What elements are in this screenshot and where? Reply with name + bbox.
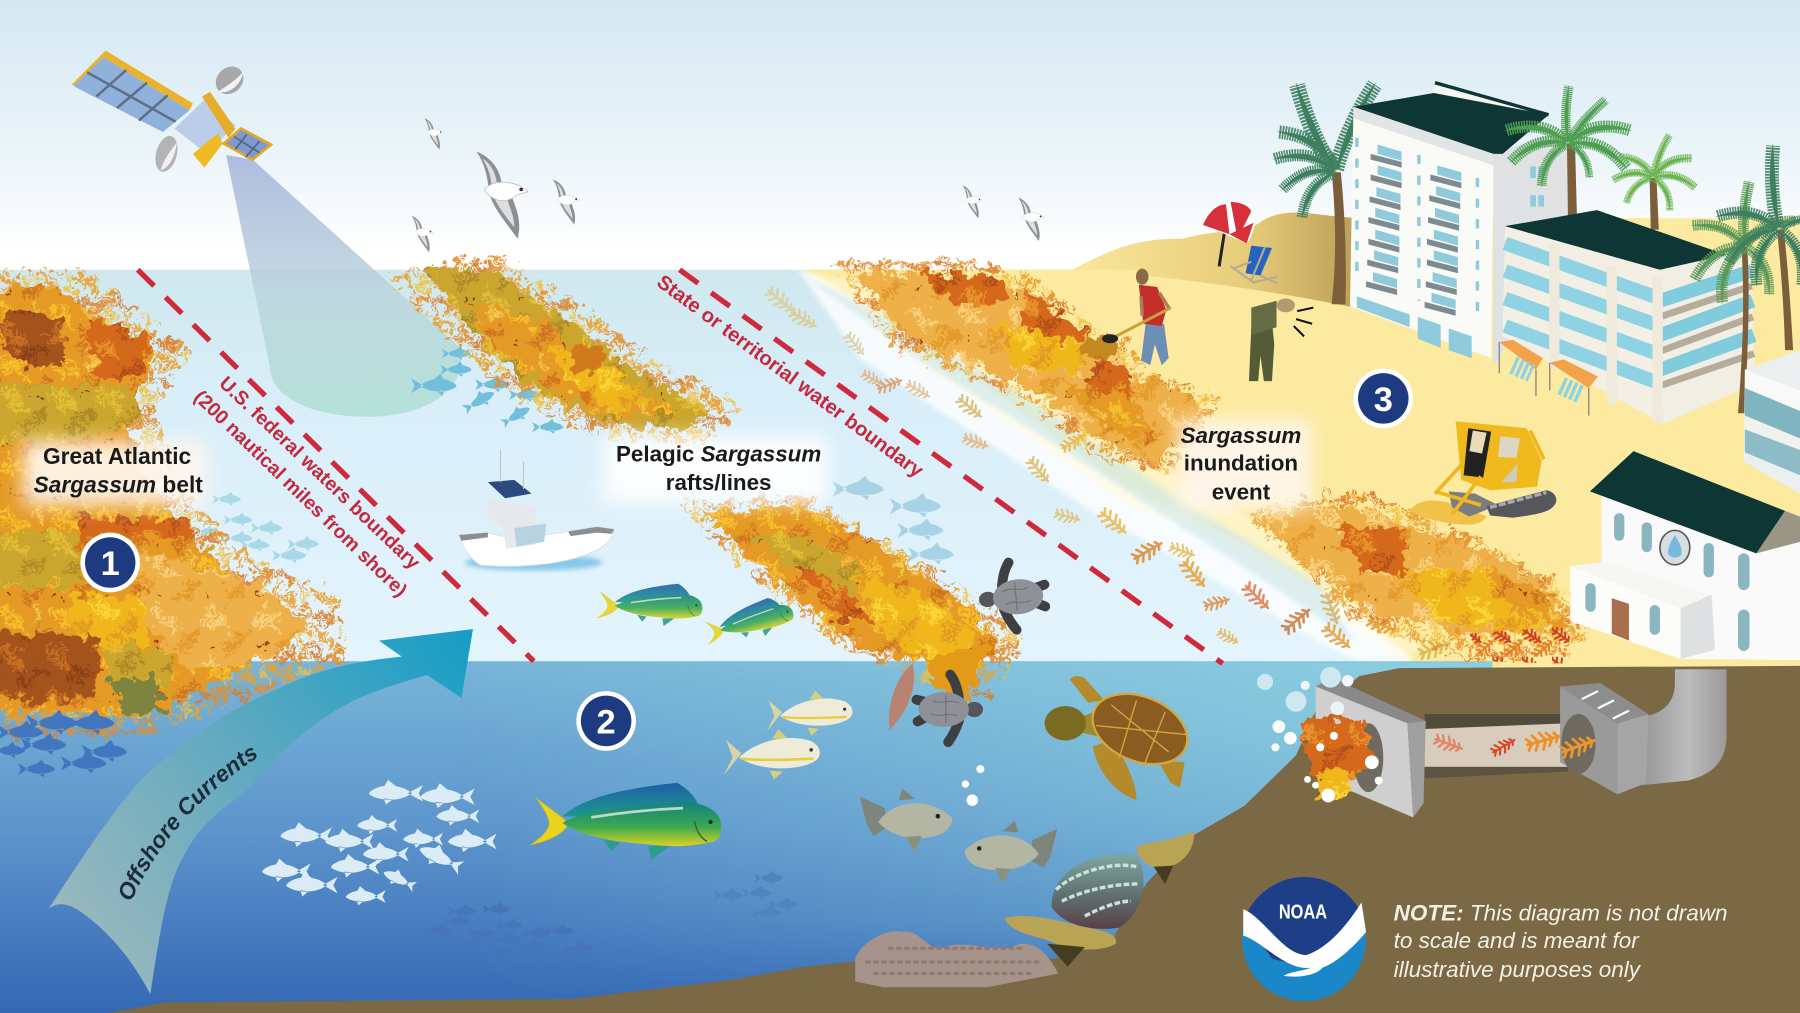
sargassum inundation on lower beach — [1246, 488, 1590, 664]
number marker 1: 1 — [101, 545, 120, 583]
state waters boundary dashed line — [680, 270, 1223, 664]
storefront awning left — [1499, 340, 1543, 396]
boat — [459, 450, 614, 571]
pale wet sand strip — [820, 276, 1423, 664]
palm far right — [1715, 143, 1800, 350]
water intake pipe — [1303, 669, 1727, 817]
number marker 1 — [80, 533, 140, 592]
pale fish near left belt — [195, 492, 319, 563]
surf foam along shoreline — [798, 270, 1412, 677]
hotel tower — [1350, 82, 1572, 367]
inundation mass — [855, 273, 1203, 462]
dark fish school left — [0, 710, 127, 777]
sargassum raft upper ocean — [390, 255, 740, 445]
label: state or territorial water boundary: State or territorial water boundary — [653, 271, 928, 483]
federal waters boundary dashed line — [138, 270, 534, 661]
inundation mass — [1263, 506, 1575, 637]
red sprigs at beach edge — [1469, 626, 1573, 664]
coral rubble — [855, 931, 1058, 987]
disclaimer note: illustrative purposes only — [1394, 957, 1642, 982]
man coughing — [1249, 298, 1313, 381]
connecting tube — [1425, 714, 1568, 778]
label: federal waters boundary: U.S. federal waters boundary — [215, 372, 424, 574]
dark fish school deep — [424, 902, 593, 967]
solar panel small — [224, 129, 271, 160]
sargassum entering intake — [1303, 717, 1375, 798]
roof — [1353, 93, 1549, 154]
seabirds near the beach — [962, 185, 1044, 241]
front face — [1350, 107, 1493, 358]
roof — [1590, 451, 1785, 553]
number marker 2 — [576, 691, 636, 751]
green sea turtle — [1045, 676, 1198, 800]
white fish school — [262, 780, 496, 905]
blade — [1410, 501, 1487, 525]
satellite beam — [226, 155, 461, 417]
roll cage arm — [1435, 431, 1544, 514]
triggerfish left-facing — [965, 821, 1057, 884]
arrow label: Offshore Currents — [120, 748, 257, 900]
left face — [1503, 226, 1663, 424]
inundation lacy edge — [832, 258, 1223, 476]
arched windows — [1585, 513, 1749, 651]
belt lacy edge — [0, 271, 344, 735]
blue fish under first raft — [411, 346, 563, 434]
label: Pelagic Sargassum rafts/lines: rafts/lines — [666, 470, 771, 495]
rising bubbles — [962, 765, 984, 806]
NOAA logo — [1242, 877, 1366, 1001]
small palm right — [1612, 134, 1698, 230]
rear filter box — [1560, 683, 1648, 794]
small turtle at surface — [976, 560, 1048, 633]
right face — [1493, 126, 1572, 367]
pilasters — [1554, 243, 1658, 422]
rear track inner — [1449, 491, 1498, 517]
beach umbrella — [1203, 202, 1255, 266]
palm front of second building — [1687, 180, 1798, 413]
main track — [1487, 490, 1556, 518]
label: Great Atlantic Sargassum belt: Sargassum belt — [34, 471, 203, 497]
right face — [1660, 247, 1755, 424]
main body — [1601, 494, 1800, 660]
sargassum raft lower ocean — [683, 494, 1024, 703]
teal wash by the shore — [804, 276, 1355, 643]
roof — [1505, 210, 1727, 270]
second hotel building — [1499, 210, 1755, 424]
balcony windows — [1366, 145, 1461, 316]
disclaimer note: NOTE: This diagram is not drawn — [1394, 901, 1727, 926]
surface dolphinfish — [597, 584, 797, 651]
side windows — [1530, 172, 1544, 201]
right face stripes — [1660, 271, 1754, 370]
sky background — [0, 0, 1800, 298]
municipal water building — [1570, 451, 1800, 660]
underwater cross-section — [0, 661, 1492, 1013]
label glow: inundation — [1178, 420, 1311, 510]
satellite — [71, 51, 271, 174]
solar panel large — [71, 51, 193, 132]
parapet — [1353, 107, 1493, 165]
ocean surface seen from above — [0, 270, 1492, 666]
number marker 3: 3 — [1374, 381, 1393, 419]
raft mass — [427, 266, 709, 429]
belt mass — [0, 287, 312, 717]
front intake wall — [1316, 677, 1426, 817]
beach chair — [1231, 246, 1278, 284]
palm tree behind hotel left — [1268, 82, 1379, 304]
plate coral lower — [1004, 916, 1116, 967]
storefront awning right — [1550, 359, 1598, 416]
penthouse — [1434, 82, 1549, 129]
door — [1612, 598, 1629, 641]
left face stripes — [1505, 243, 1660, 383]
scattered nearshore sargassum — [764, 285, 1452, 661]
small turtle under raft — [916, 675, 983, 742]
dark fish group right — [714, 871, 798, 919]
pale fish mid ocean — [832, 476, 953, 565]
offshore currents arrow — [48, 629, 473, 994]
number marker 3 — [1353, 369, 1413, 428]
outlet pipe — [1630, 669, 1727, 786]
inundation lacy edge — [1246, 488, 1590, 660]
label: 200 nautical miles: (200 nautical miles from shore) — [189, 386, 411, 601]
worker with shovel — [1102, 269, 1171, 365]
cab — [1456, 421, 1542, 490]
sandy beach and dune — [804, 213, 1800, 672]
sargassum inundation on upper beach — [832, 258, 1223, 476]
label: Sargassum inundation event: inundation — [1184, 451, 1298, 476]
label glow: rafts — [603, 436, 828, 503]
water drop medallion — [1660, 530, 1690, 565]
sargassum belt left — [0, 271, 344, 735]
palm behind hotel right — [1504, 84, 1633, 230]
bulldozer — [1410, 421, 1556, 525]
satellite body — [174, 92, 235, 168]
seabirds over the ocean — [412, 118, 580, 252]
raft lacy edge — [683, 494, 1024, 703]
antenna dishes — [152, 61, 249, 174]
label: Sargassum inundation event: event — [1212, 479, 1271, 504]
triggerfish right-facing — [860, 789, 952, 852]
raft mass — [706, 505, 996, 695]
right edge building — [1744, 350, 1800, 494]
large dolphinfish — [530, 783, 721, 860]
front wing — [1570, 561, 1715, 659]
jack fish — [724, 691, 852, 779]
raft lacy edge — [390, 255, 740, 445]
intake bubbles — [1257, 667, 1383, 802]
cab windows — [1464, 428, 1491, 478]
disclaimer note: to scale and is meant for — [1394, 928, 1640, 953]
kelp leaf — [889, 664, 914, 730]
plate coral upper — [1136, 831, 1194, 884]
seabed and land cross-section — [109, 666, 1800, 1013]
NOAA wordmark: NOAA — [1279, 900, 1327, 923]
label: Pelagic Sargassum rafts/lines: Pelagic Sargassum — [616, 442, 821, 466]
number marker 2: 2 — [597, 704, 616, 742]
ground floor windows — [1357, 296, 1472, 358]
label glow: belt — [23, 441, 207, 505]
label: Great Atlantic Sargassum belt: Great Atlantic — [43, 443, 191, 469]
slit windows — [1357, 138, 1477, 321]
label: Sargassum inundation event: Sargassum — [1181, 423, 1301, 448]
brain coral — [1052, 854, 1144, 929]
